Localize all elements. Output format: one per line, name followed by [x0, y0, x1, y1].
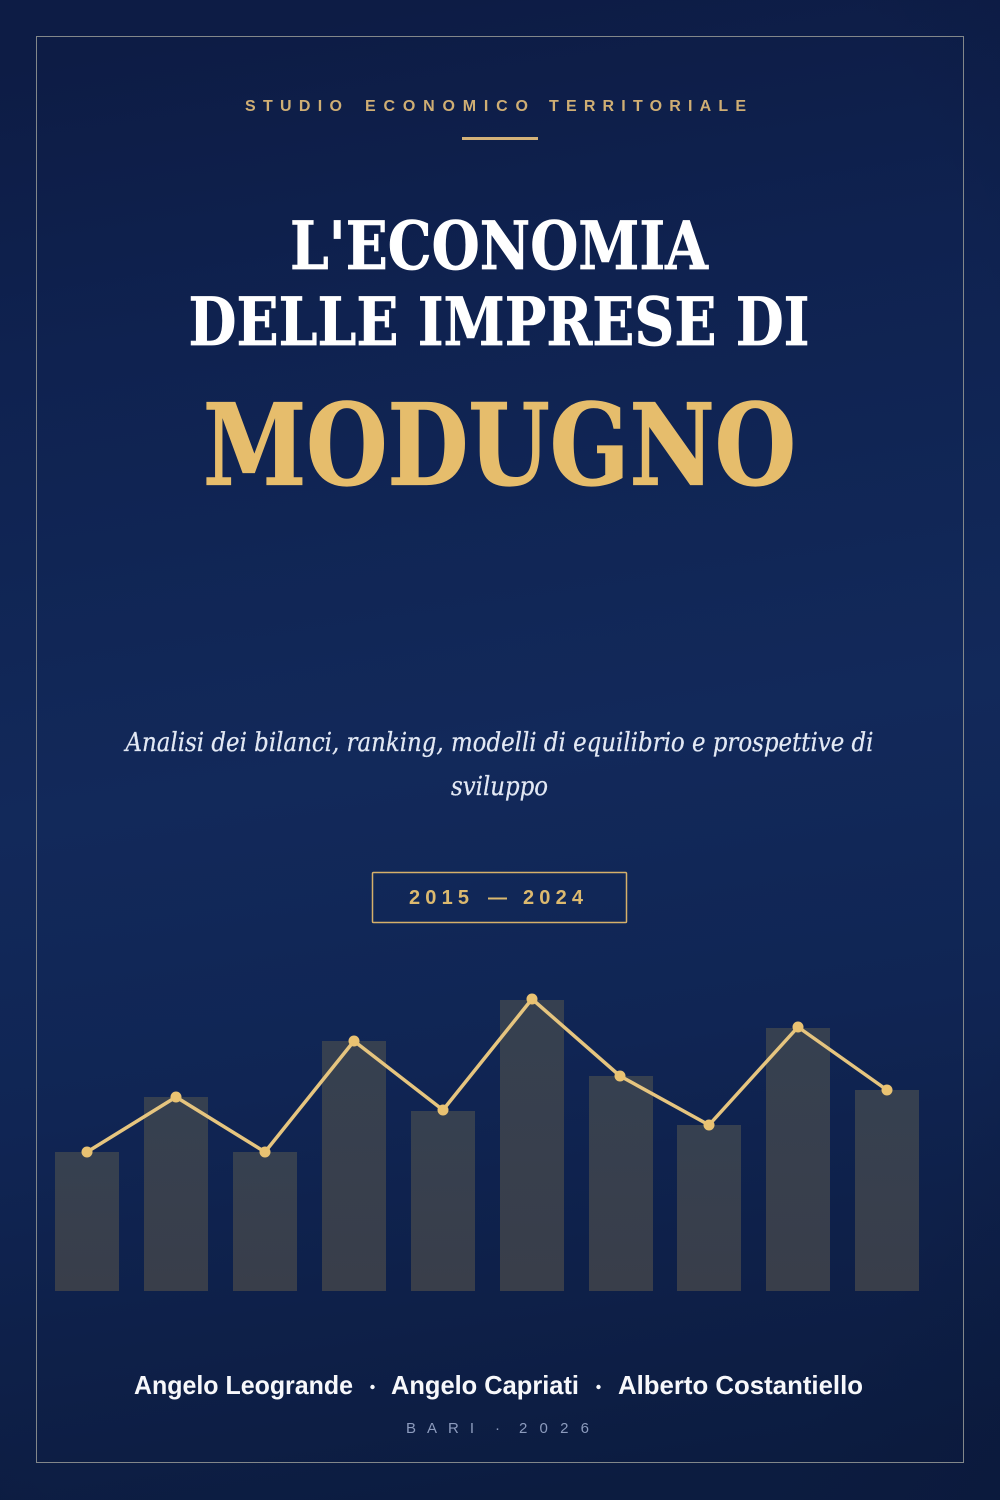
authors: Alberto Costantiello — [618, 1370, 863, 1400]
publisher and year: · — [495, 1420, 500, 1437]
publisher and year: 2026 — [519, 1420, 589, 1437]
subtitle — [124, 728, 873, 802]
publisher and year — [406, 1420, 589, 1437]
eyebrow label: STUDIO — [245, 98, 342, 115]
authors: Angelo Capriati — [391, 1370, 579, 1400]
data points — [82, 994, 892, 1158]
title: MODUGNO — [203, 380, 796, 512]
date badge: 2015 — [409, 887, 469, 909]
publisher and year: BARI — [406, 1420, 474, 1437]
date badge: 2024 — [523, 887, 584, 909]
date badge — [372, 872, 626, 922]
subtitle: sviluppo — [451, 772, 548, 802]
eyebrow label: ECONOMICO — [365, 98, 528, 115]
eyebrow label — [245, 98, 746, 115]
bars — [55, 1000, 919, 1291]
accent rule — [462, 137, 538, 140]
authors — [134, 1370, 863, 1400]
title — [188, 207, 810, 512]
title: DELLE IMPRESE DI — [188, 283, 810, 361]
authors: Angelo Leogrande — [134, 1370, 353, 1400]
eyebrow label: TERRITORIALE — [549, 98, 746, 115]
date badge: — — [488, 887, 507, 909]
title: L'ECONOMIA — [290, 207, 709, 285]
subtitle: Analisi dei bilanci, ranking, modelli di equilibrio e prospettive di — [124, 728, 873, 758]
trend line — [87, 999, 887, 1152]
bar and line chart — [55, 994, 919, 1291]
